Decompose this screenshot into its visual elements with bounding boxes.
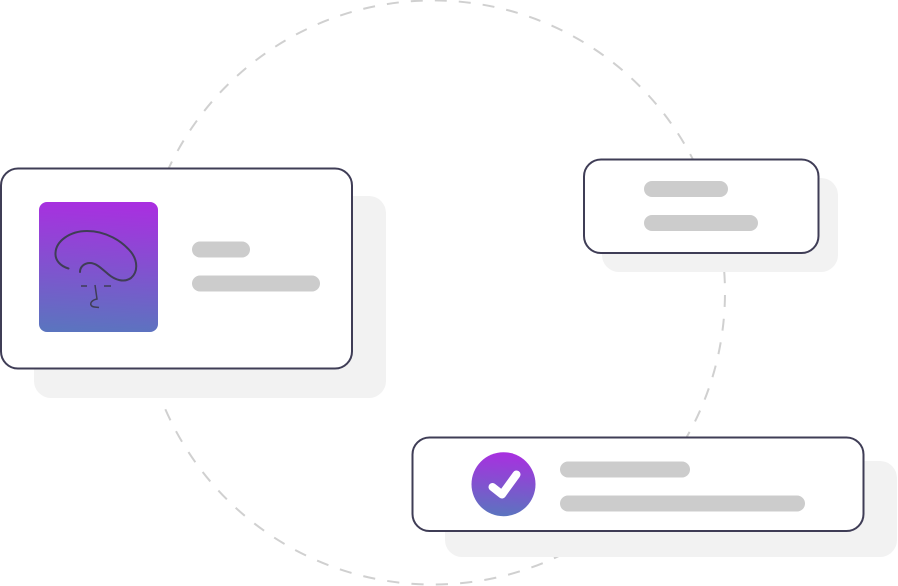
info card body: [584, 160, 818, 253]
profile card shadow: [34, 196, 386, 398]
panel: small info card: [584, 160, 838, 272]
avatar with face drawing: [39, 202, 158, 332]
panel: profile card: [1, 168, 386, 398]
profile card body: [1, 168, 352, 368]
panel: verified card: [412, 438, 897, 557]
info card shadow: [602, 178, 838, 272]
profile name placeholder: [192, 242, 250, 258]
verified title placeholder: [560, 462, 690, 478]
profile detail placeholder: [192, 276, 320, 292]
verified detail placeholder: [560, 496, 805, 512]
dashed orbit circle: [164, 0, 725, 585]
verified card shadow: [445, 461, 897, 557]
verified card body: [412, 438, 864, 531]
info detail placeholder: [644, 215, 758, 231]
info title placeholder: [644, 181, 728, 197]
icon: check badge: [472, 452, 536, 516]
